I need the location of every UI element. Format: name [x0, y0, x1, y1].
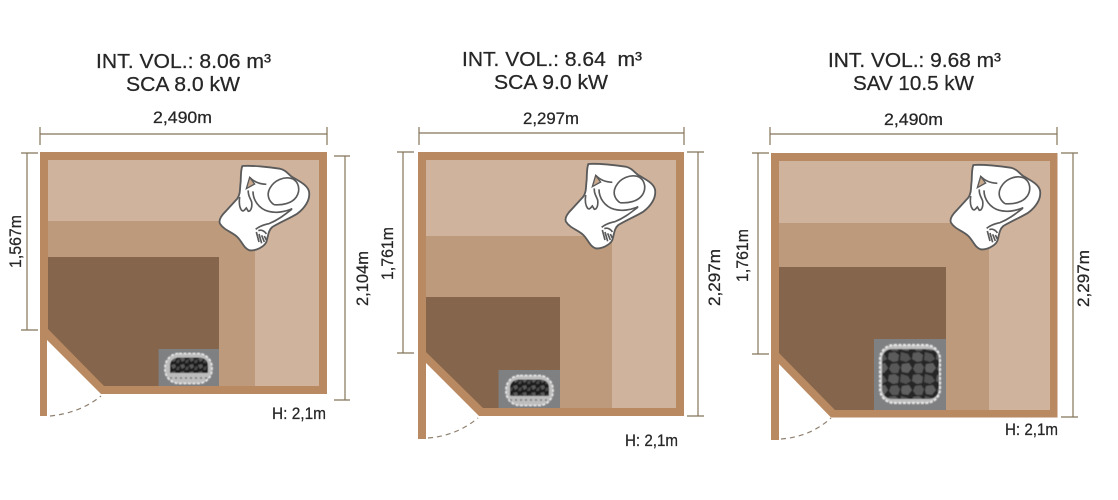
height label: plan 1: H: 2,1m — [272, 405, 326, 423]
left dimension: plan 3: 1,761m — [734, 229, 752, 282]
heading: plan 3: SAV 10.5 kW — [853, 72, 975, 95]
height label: plan 2: H: 2,1m — [625, 432, 678, 450]
heading: plan 1: SCA 8.0 kW — [126, 73, 241, 96]
width dimension: plan 3: 2,490m — [884, 111, 943, 129]
bench middle: plan 3 — [779, 223, 989, 410]
heading: plan 2: SCA 9.0 kW — [494, 71, 609, 94]
bench right: plan 1 — [255, 221, 319, 386]
door swing: plan 2 — [428, 418, 478, 438]
floor: plan 1 — [48, 257, 219, 386]
right dimension: plan 2 — [687, 152, 724, 416]
floor: plan 3 — [779, 267, 946, 410]
panel: plan 3 — [734, 49, 1093, 440]
floor: plan 2 — [426, 297, 560, 408]
bench top: plan 1 — [48, 160, 319, 221]
left dimension: plan 2 — [379, 152, 414, 353]
right dimension: plan 3 — [1061, 153, 1093, 417]
heading: plan 2: INT. VOL.: 8.64 m³ — [462, 48, 642, 71]
heater: plan 3 — [874, 339, 946, 410]
right dimension: plan 3: 2,297m — [1075, 250, 1093, 307]
heading: plan 3 — [828, 49, 1001, 95]
heading: plan 1 — [96, 50, 271, 96]
door swing: plan 1 — [50, 396, 101, 416]
panel: plan 2 — [379, 48, 724, 450]
bench top: plan 3 — [779, 161, 1050, 223]
icon: seated person plan 3 — [951, 165, 1040, 249]
height label: plan 3: H: 2,1m — [1005, 421, 1058, 439]
width dimension: plan 2: 2,297m — [523, 110, 579, 128]
width dimension: plan 1: 2,490m — [153, 109, 212, 127]
room walls: plan 3 — [771, 153, 1058, 440]
heading: plan 3: INT. VOL.: 9.68 m³ — [828, 49, 1001, 72]
bench middle: plan 2 — [426, 236, 612, 408]
right dimension: plan 1: 2,104m — [354, 251, 372, 306]
right dimension: plan 2: 2,297m — [706, 249, 724, 306]
icon: seated person plan 1 — [220, 166, 309, 250]
icon: seated person plan 2 — [566, 164, 655, 248]
bench top: plan 2 — [426, 160, 676, 236]
bench right: plan 2 — [612, 236, 676, 408]
width dimension: plan 3 — [770, 111, 1057, 145]
heater: plan 2 — [498, 370, 560, 408]
heading: plan 2 — [462, 48, 642, 94]
heading: plan 1: INT. VOL.: 8.06 m³ — [96, 50, 271, 73]
left dimension: plan 1: 1,567m — [7, 215, 25, 268]
width dimension: plan 2 — [419, 110, 684, 145]
left dimension: plan 1 — [7, 153, 38, 330]
room walls: plan 2 — [418, 152, 684, 439]
left dimension: plan 2: 1,761m — [379, 227, 397, 280]
right dimension: plan 1 — [334, 156, 372, 400]
bench middle: plan 1 — [48, 221, 255, 386]
heater: plan 1 — [158, 349, 219, 386]
width dimension: plan 1 — [40, 109, 327, 145]
left dimension: plan 3 — [734, 153, 769, 354]
door swing: plan 3 — [781, 418, 831, 439]
panel: plan 1 — [7, 50, 372, 423]
bench right: plan 3 — [989, 223, 1050, 410]
room walls: plan 1 — [40, 152, 327, 416]
